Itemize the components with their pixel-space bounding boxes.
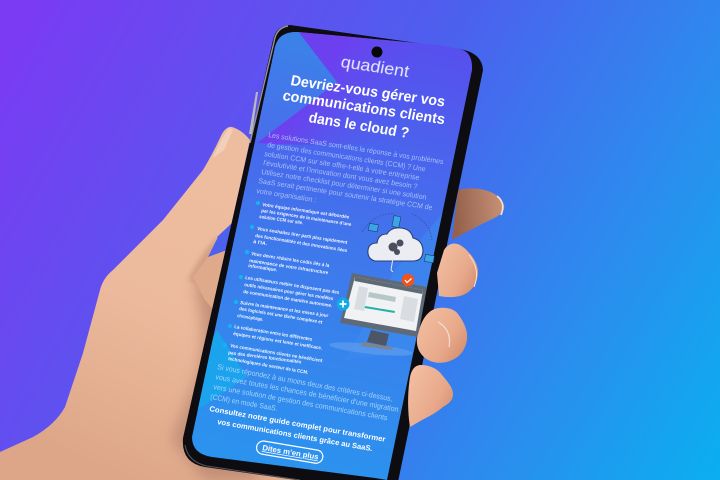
icon: envelope: [368, 223, 378, 232]
item 5: chronophage.: [237, 313, 264, 323]
blue top-left wedge: [250, 30, 337, 143]
call to action text: vos communications clients grâce au SaaS.: [217, 417, 373, 453]
title: [281, 73, 446, 142]
item 7: Vos communications clients ne bénéficient: [230, 343, 323, 364]
screen: [192, 32, 472, 480]
monitor app header: [354, 277, 423, 294]
icon: mobile device: [392, 215, 401, 228]
illustration: cloud and monitor: [329, 214, 434, 358]
right finger 2: [437, 243, 478, 297]
title: communications clients: [281, 88, 446, 128]
thumb nail: [213, 128, 233, 158]
monitor app teal bar: [364, 306, 395, 313]
item 2: Vous souhaitez tirer parti plus rapidement: [257, 226, 348, 246]
button: [255, 440, 324, 464]
dashed orbit: [362, 214, 432, 240]
closing paragraph: vers une solution de gestion des communications clients: [213, 382, 389, 422]
thumb crease shadow: [188, 238, 232, 300]
item 6: [228, 324, 323, 352]
item 3: informatique.: [248, 263, 278, 273]
intro paragraph: [256, 130, 445, 212]
badge: blue plus: [336, 298, 350, 310]
closing paragraph: [210, 362, 399, 422]
hand: [0, 127, 504, 480]
item 1: par les exigences de la maintenance d'une: [261, 208, 352, 228]
purple wedge: [257, 30, 420, 145]
item 3: [245, 250, 330, 276]
hand shading near phone: [172, 260, 260, 480]
item 1: solution CCM sur site.: [259, 214, 304, 226]
index finger base: [193, 250, 236, 320]
phone: [180, 25, 483, 480]
monitor app columns: [354, 286, 418, 322]
closing paragraph: (CCM) en mode SaaS.: [210, 392, 278, 413]
checklist: [223, 201, 352, 376]
title: Devriez-vous gérer vos: [289, 73, 446, 111]
right finger 1: [452, 188, 504, 240]
item 4: Les utilisateurs métier ne disposent pas des: [245, 275, 340, 296]
light wedge behind monitor: [390, 213, 442, 352]
badge: orange check: [402, 274, 414, 286]
monitor base: [361, 342, 393, 350]
phone body: [183, 25, 483, 480]
connector: [391, 258, 393, 272]
item 1: [256, 201, 352, 228]
cyan lower-left shape: [198, 330, 247, 410]
intro paragraph: l'évolutivité et l'innovation dont vous avez besoin ?: [263, 158, 418, 191]
button: Dites m'en plus: [262, 443, 319, 461]
title: dans le cloud ?: [307, 110, 410, 142]
icon: small envelope right: [424, 254, 434, 263]
intro paragraph: de gestion des communications clients (CCM) ? Une: [267, 140, 426, 173]
item 4: outils nécessaires pour gérer les modèles: [244, 282, 334, 302]
icon: cloud: [368, 228, 423, 261]
item 2: [250, 225, 348, 254]
item 3: Vous devez réduire les coûts liés à la: [251, 251, 330, 269]
monitor stand: [367, 330, 389, 346]
item 1: Votre équipe informatique est débordée: [262, 202, 350, 221]
right finger 1 nail: [497, 196, 503, 215]
right finger 3 nail: [438, 322, 450, 347]
gap between thumb and index: [208, 224, 232, 257]
intro paragraph: solution CCM sur site offre-t-elle à votre entreprise: [264, 149, 420, 182]
right finger 4: [408, 365, 453, 427]
camera hole: [372, 46, 382, 58]
item 6: La collaboration entre les différentes: [234, 324, 313, 343]
intro paragraph: votre organisation :: [256, 186, 317, 204]
item 7: technologiques du secteur de la CCM.: [228, 356, 309, 376]
logo: quadient: [339, 53, 411, 81]
closing paragraph: vous avez toutes les chances de bénéficier d'une migration: [215, 372, 399, 414]
palm and thumb: [0, 127, 330, 480]
item 4: de communication de manière autonome.: [243, 289, 333, 309]
item 5: des logiciels est une tâche complexe et: [239, 306, 323, 326]
item 6: équipes et régions est lente et inefficace.: [233, 331, 323, 352]
item 7: [223, 343, 323, 376]
intro paragraph: SaaS serait pertinente pour soutenir la stratégie CCM de: [258, 176, 433, 212]
closing paragraph: Si vous répondez à au moins deux des critères ci-dessus,: [217, 362, 393, 403]
side button: [249, 92, 258, 134]
monitor screen: [344, 277, 423, 331]
monitor bezel: [340, 273, 427, 337]
right finger 3: [417, 308, 467, 363]
right finger 2 nail: [469, 255, 477, 287]
monitor shadow: [329, 340, 413, 358]
icon: gears: [388, 240, 404, 255]
monitor app bar: [368, 292, 396, 302]
phone metal edge: [250, 26, 288, 143]
item 5: [234, 300, 329, 326]
intro paragraph: Les solutions SaaS sont-elles la réponse à vos problèmes: [268, 130, 445, 166]
fingers wrapping over phone edge: [408, 243, 478, 427]
item 2: à l'IA.: [253, 239, 268, 247]
item 5: Suivre la maintenance et les mises à jour: [240, 300, 329, 319]
item 2: des fonctionnalités et des innovations liées: [255, 233, 348, 254]
phone bottom edge highlight: [185, 445, 300, 480]
item 3: maintenance de votre infrastructure: [249, 258, 329, 276]
item 4: [239, 275, 340, 309]
item 7: pas des dernières fonctionnalités: [228, 350, 302, 366]
screen decorative shapes: [180, 30, 445, 410]
intro paragraph: Utilisez notre checklist pour déterminer si une solution: [261, 167, 427, 202]
call to action text: Consultez notre guide complet pour transformer: [209, 404, 386, 444]
